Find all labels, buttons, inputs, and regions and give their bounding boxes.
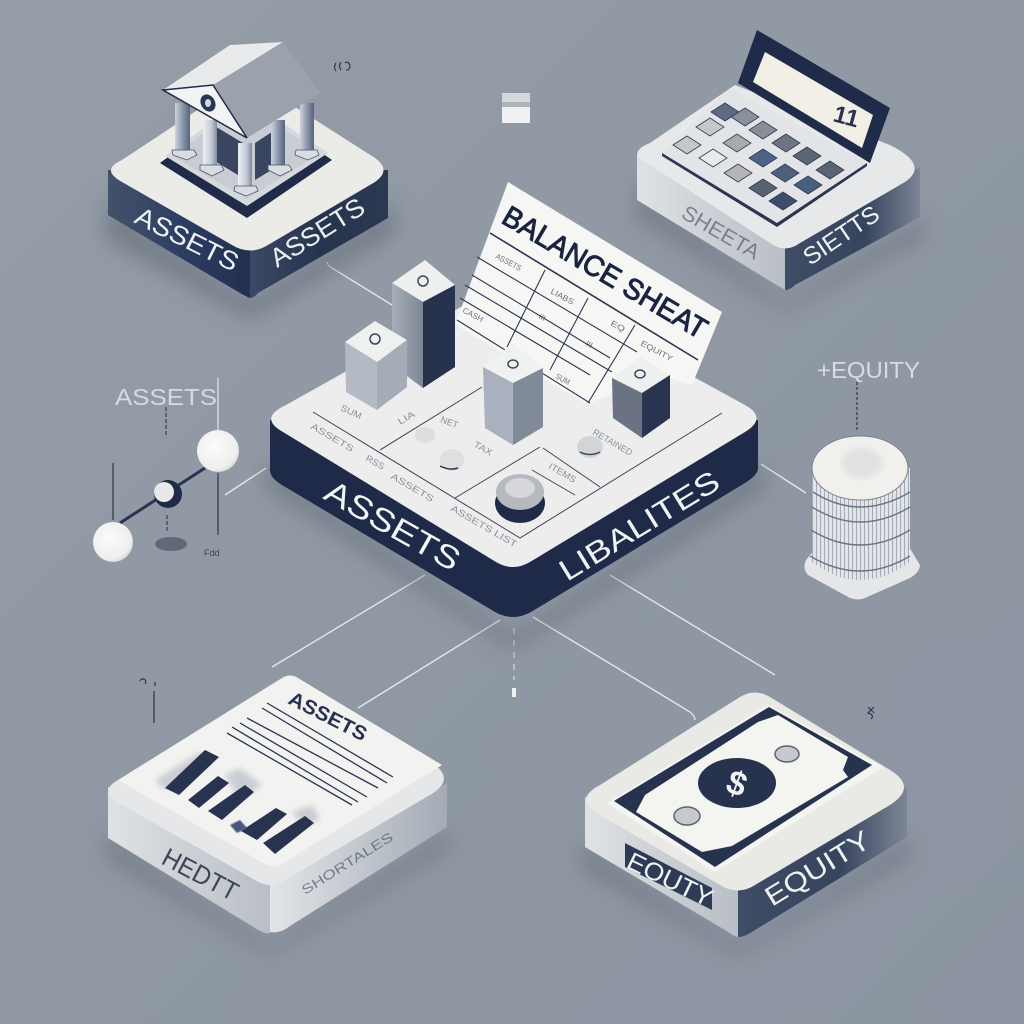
- balance sheet paper: III: [584, 339, 594, 350]
- document page: [118, 676, 442, 867]
- banknote: [607, 705, 883, 872]
- panel: central balance sheet platform: [265, 182, 765, 650]
- platform small text: ASSETS: [309, 421, 356, 454]
- bar 2: [392, 260, 455, 388]
- panel: molecule network: Fdd: [204, 548, 220, 558]
- platform top: [111, 80, 384, 250]
- small marks: [140, 62, 874, 723]
- platform grid lines: [313, 387, 722, 538]
- platform small text: RETAINED: [591, 427, 635, 458]
- panel: debt document: ASSETS: [285, 688, 370, 746]
- icon: bank building: [160, 42, 332, 218]
- assets labels: ASSETS: [130, 201, 244, 277]
- panel: equity banknote: EQUITY: [759, 825, 876, 912]
- label assets: ASSETS: [115, 384, 217, 410]
- panel: central balance sheet platform: LIBALITES: [553, 465, 726, 588]
- platform knobs: [415, 427, 603, 471]
- panel: assets bank: ASSETS: [264, 191, 370, 273]
- balance sheet paper: ASSETS: [494, 252, 523, 273]
- balance sheet paper: BALANCE SHEAT: [496, 200, 713, 346]
- platform small text: LIA: [396, 409, 417, 427]
- balance sheet paper: CASH: [461, 306, 485, 324]
- bar 1: [345, 321, 407, 410]
- platform small text: TAX: [472, 439, 494, 458]
- panel: debt document: [105, 676, 450, 955]
- calculator body: [662, 88, 867, 223]
- platform small text: ITEMS: [547, 461, 578, 485]
- balance sheet paper: EQUITY: [639, 339, 675, 364]
- platform sides: [270, 420, 758, 617]
- platform small text: NET: [439, 414, 460, 430]
- equity labels: EOUTY: [622, 847, 718, 913]
- platform small text: ASSETS: [389, 471, 436, 504]
- platform small text: ASSETS LIST: [449, 503, 520, 550]
- panel: debt document: HEDTT: [157, 842, 244, 907]
- panel: molecule network: [93, 378, 239, 562]
- connector lines: [225, 262, 806, 720]
- panel: debt document: SHORTALES: [299, 829, 396, 898]
- platform small text: [309, 403, 635, 550]
- balance sheet paper: [455, 182, 722, 404]
- platform labels: ASSETS: [319, 473, 467, 578]
- calculator screen: [738, 30, 890, 163]
- panel: calculator: [635, 30, 925, 310]
- equity label: +EQUITY: [817, 357, 920, 383]
- panel: calculator: SIETTS: [798, 200, 885, 271]
- balance sheet paper: LIABS: [549, 287, 575, 307]
- balance sheet paper: III: [537, 312, 547, 323]
- calculator labels: SHEETA: [678, 201, 763, 264]
- platform top: [271, 282, 756, 567]
- panel: equity banknote: [580, 692, 910, 955]
- platform small text: RSS: [364, 453, 386, 472]
- panel: coin stack equity: [804, 357, 920, 600]
- bar 3: [483, 343, 543, 445]
- bar 4: [612, 357, 670, 438]
- calculator keys: [673, 103, 844, 210]
- document bar chart: [155, 750, 320, 854]
- balance sheet paper: EQ: [609, 319, 627, 334]
- panel: assets bank: [105, 42, 395, 320]
- platform small text: SUM: [339, 403, 363, 421]
- bar chart blocks: [345, 260, 670, 445]
- navy knob: [495, 474, 545, 523]
- panel: equity banknote: $: [721, 763, 752, 805]
- panel: calculator: 11: [830, 101, 862, 133]
- balance sheet paper: SUM: [554, 372, 572, 387]
- equals symbol: [502, 93, 530, 123]
